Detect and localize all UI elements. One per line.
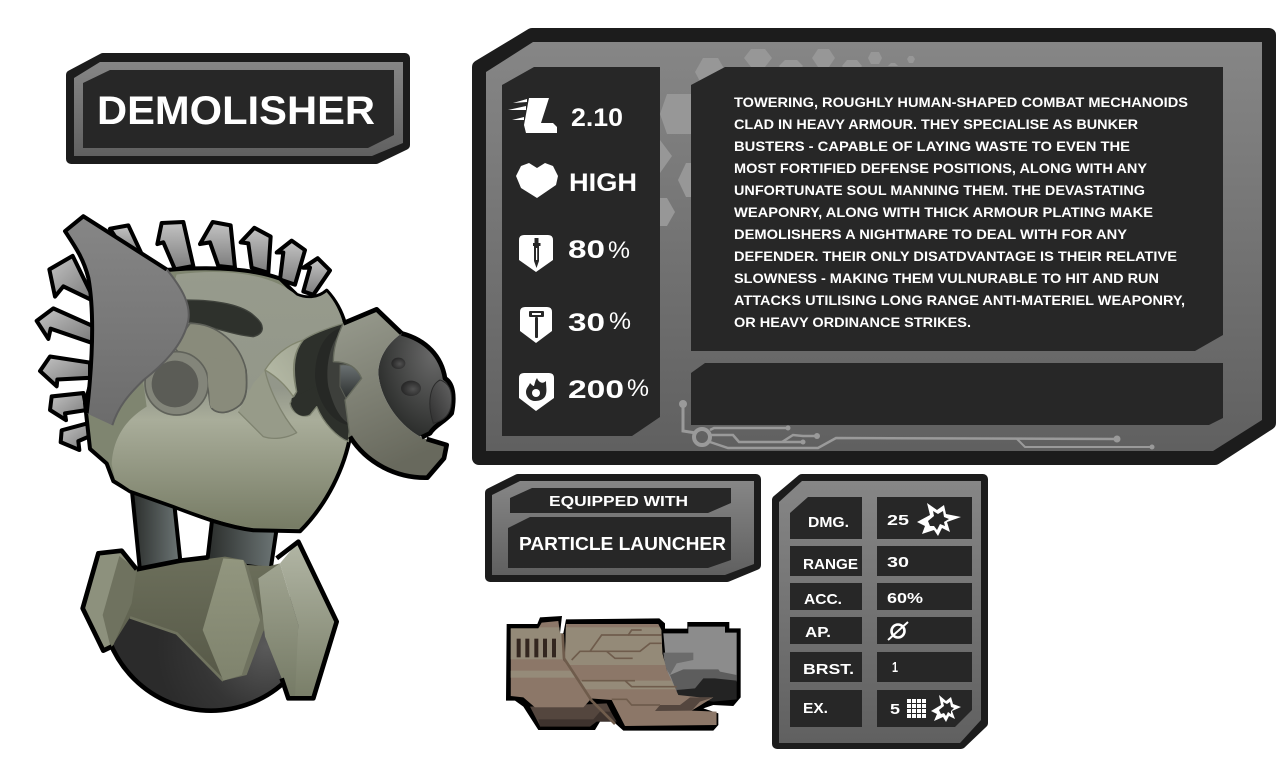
- right thigh plate: [258, 542, 337, 698]
- row: explosion: [790, 690, 972, 727]
- weapon rear body: [510, 621, 590, 708]
- melee armour value: 80: [568, 236, 605, 264]
- row: armour penetration: AP.: [805, 624, 831, 641]
- row: explosion: 5: [890, 701, 900, 718]
- illustration: demolisher mechanoid: [37, 216, 453, 711]
- row: damage: DMG.: [808, 514, 849, 531]
- description text: BUSTERS - CAPABLE OF LAYING WASTE TO EVEN THE: [734, 139, 1130, 154]
- ear fin: [65, 216, 189, 425]
- weapon front body: [563, 620, 720, 728]
- description text: CLAD IN HEAVY ARMOUR. THEY SPECIALISE AS BUNKER: [734, 117, 1138, 132]
- lens: [340, 365, 362, 398]
- row: burst: 1: [892, 659, 898, 676]
- fire armour value: %: [627, 375, 649, 402]
- sensor ports: [391, 358, 421, 396]
- row: burst: [790, 652, 972, 682]
- weapon accent: [655, 697, 713, 711]
- ranged armour value: %: [609, 308, 631, 335]
- icon: damage burst: [917, 503, 961, 536]
- row: explosion: EX.: [803, 700, 828, 717]
- icon: heart: [516, 163, 558, 198]
- description text: OR HEAVY ORDINANCE STRIKES.: [734, 315, 971, 330]
- icon: explosion burst: [931, 695, 961, 722]
- light chevron: [265, 340, 303, 397]
- title text: DEMOLISHER: [97, 89, 375, 133]
- sensor head: [378, 333, 453, 437]
- ranged armour value: [568, 308, 631, 337]
- chevron band: [238, 370, 297, 438]
- description text: ATTACKS UTILISING LONG RANGE ANTI-MATERIEL WEAPONRY,: [734, 293, 1185, 308]
- left thigh plate: [83, 551, 137, 651]
- cheek overlap: [207, 357, 246, 412]
- icon: fire armour shield: [519, 373, 554, 411]
- weapon lower hull: [530, 703, 617, 727]
- icon: ranged armour shield: [520, 307, 552, 343]
- melee armour value: [568, 236, 630, 264]
- row: accuracy: ACC.: [804, 591, 842, 608]
- equipped-with panel: [490, 479, 756, 577]
- row: range: [790, 546, 972, 576]
- icon: melee armour shield: [519, 235, 553, 272]
- socket: [145, 352, 208, 415]
- pelvis centre plate: [203, 558, 265, 681]
- speed value: 2.10: [571, 104, 623, 132]
- title plate: DEMOLISHER: [71, 58, 405, 159]
- row: range: RANGE: [803, 556, 858, 573]
- row: accuracy: 60%: [887, 590, 923, 607]
- weapon silhouette: [506, 616, 741, 731]
- row: range: 30: [887, 554, 909, 571]
- melee armour value: %: [608, 237, 630, 264]
- neck pillars: [132, 488, 277, 571]
- weapon vents: [517, 639, 556, 657]
- weapon barrel: [663, 627, 737, 700]
- description panel: [691, 67, 1223, 351]
- description text: DEFENDER. THEIR ONLY DISATDVANTAGE IS THEIR RELATIVE: [734, 249, 1177, 264]
- shoulder joint: [290, 323, 353, 442]
- icon: speed boot: [508, 98, 557, 133]
- arm armour: [333, 309, 447, 478]
- description text: DEMOLISHERS A NIGHTMARE TO DEAL WITH FOR ANY: [734, 227, 1127, 242]
- sensor nose: [430, 380, 452, 423]
- row: damage: [790, 497, 972, 539]
- spikes on the back of the head: [37, 222, 330, 450]
- face details layer: [145, 300, 453, 478]
- cheek panel: [173, 323, 247, 412]
- empty lower panel: [691, 363, 1223, 425]
- ranged armour value: 30: [568, 309, 605, 337]
- hexagon pattern: [660, 49, 915, 226]
- weapon stats panel: [777, 479, 983, 744]
- health value: HIGH: [569, 169, 637, 197]
- upper body layer: [37, 222, 351, 571]
- row: armour penetration: [790, 617, 972, 644]
- description text: TOWERING, ROUGHLY HUMAN-SHAPED COMBAT MECHANOIDS: [734, 95, 1188, 110]
- icon: area grid: [907, 699, 926, 718]
- row: damage: 25: [887, 512, 909, 529]
- equipped-with heading: EQUIPPED WITH: [549, 493, 688, 510]
- row: burst: BRST.: [803, 661, 854, 678]
- description text: SLOWNESS - MAKING THEM VULNURABLE TO HIT AND RUN: [734, 271, 1159, 286]
- description text: UNFORTUNATE SOUL MANNING THEM. THE DEVASTATING: [734, 183, 1145, 198]
- main info panel: [479, 35, 1269, 458]
- icon: none symbol: [888, 622, 908, 640]
- weapon name: PARTICLE LAUNCHER: [519, 534, 726, 554]
- fire armour value: 200: [568, 376, 624, 404]
- eye slit: [187, 300, 262, 337]
- weapon circuit lines: [563, 630, 677, 724]
- row: accuracy: [790, 583, 972, 610]
- description text: [734, 95, 1188, 330]
- description text: WEAPONRY, ALONG WITH THICK ARMOUR PLATING MAKE: [734, 205, 1153, 220]
- ball base: [110, 596, 298, 713]
- stats column: [502, 67, 660, 436]
- circuit traces: [679, 400, 1154, 450]
- pelvis armour: [112, 557, 280, 681]
- description text: MOST FORTIFIED DEFENSE POSITIONS, ALONG WITH ANY: [734, 161, 1147, 176]
- head shell: [85, 268, 351, 531]
- illustration: particle launcher weapon: [506, 616, 741, 731]
- fire armour value: [568, 375, 649, 404]
- lower armour layer: [83, 542, 337, 698]
